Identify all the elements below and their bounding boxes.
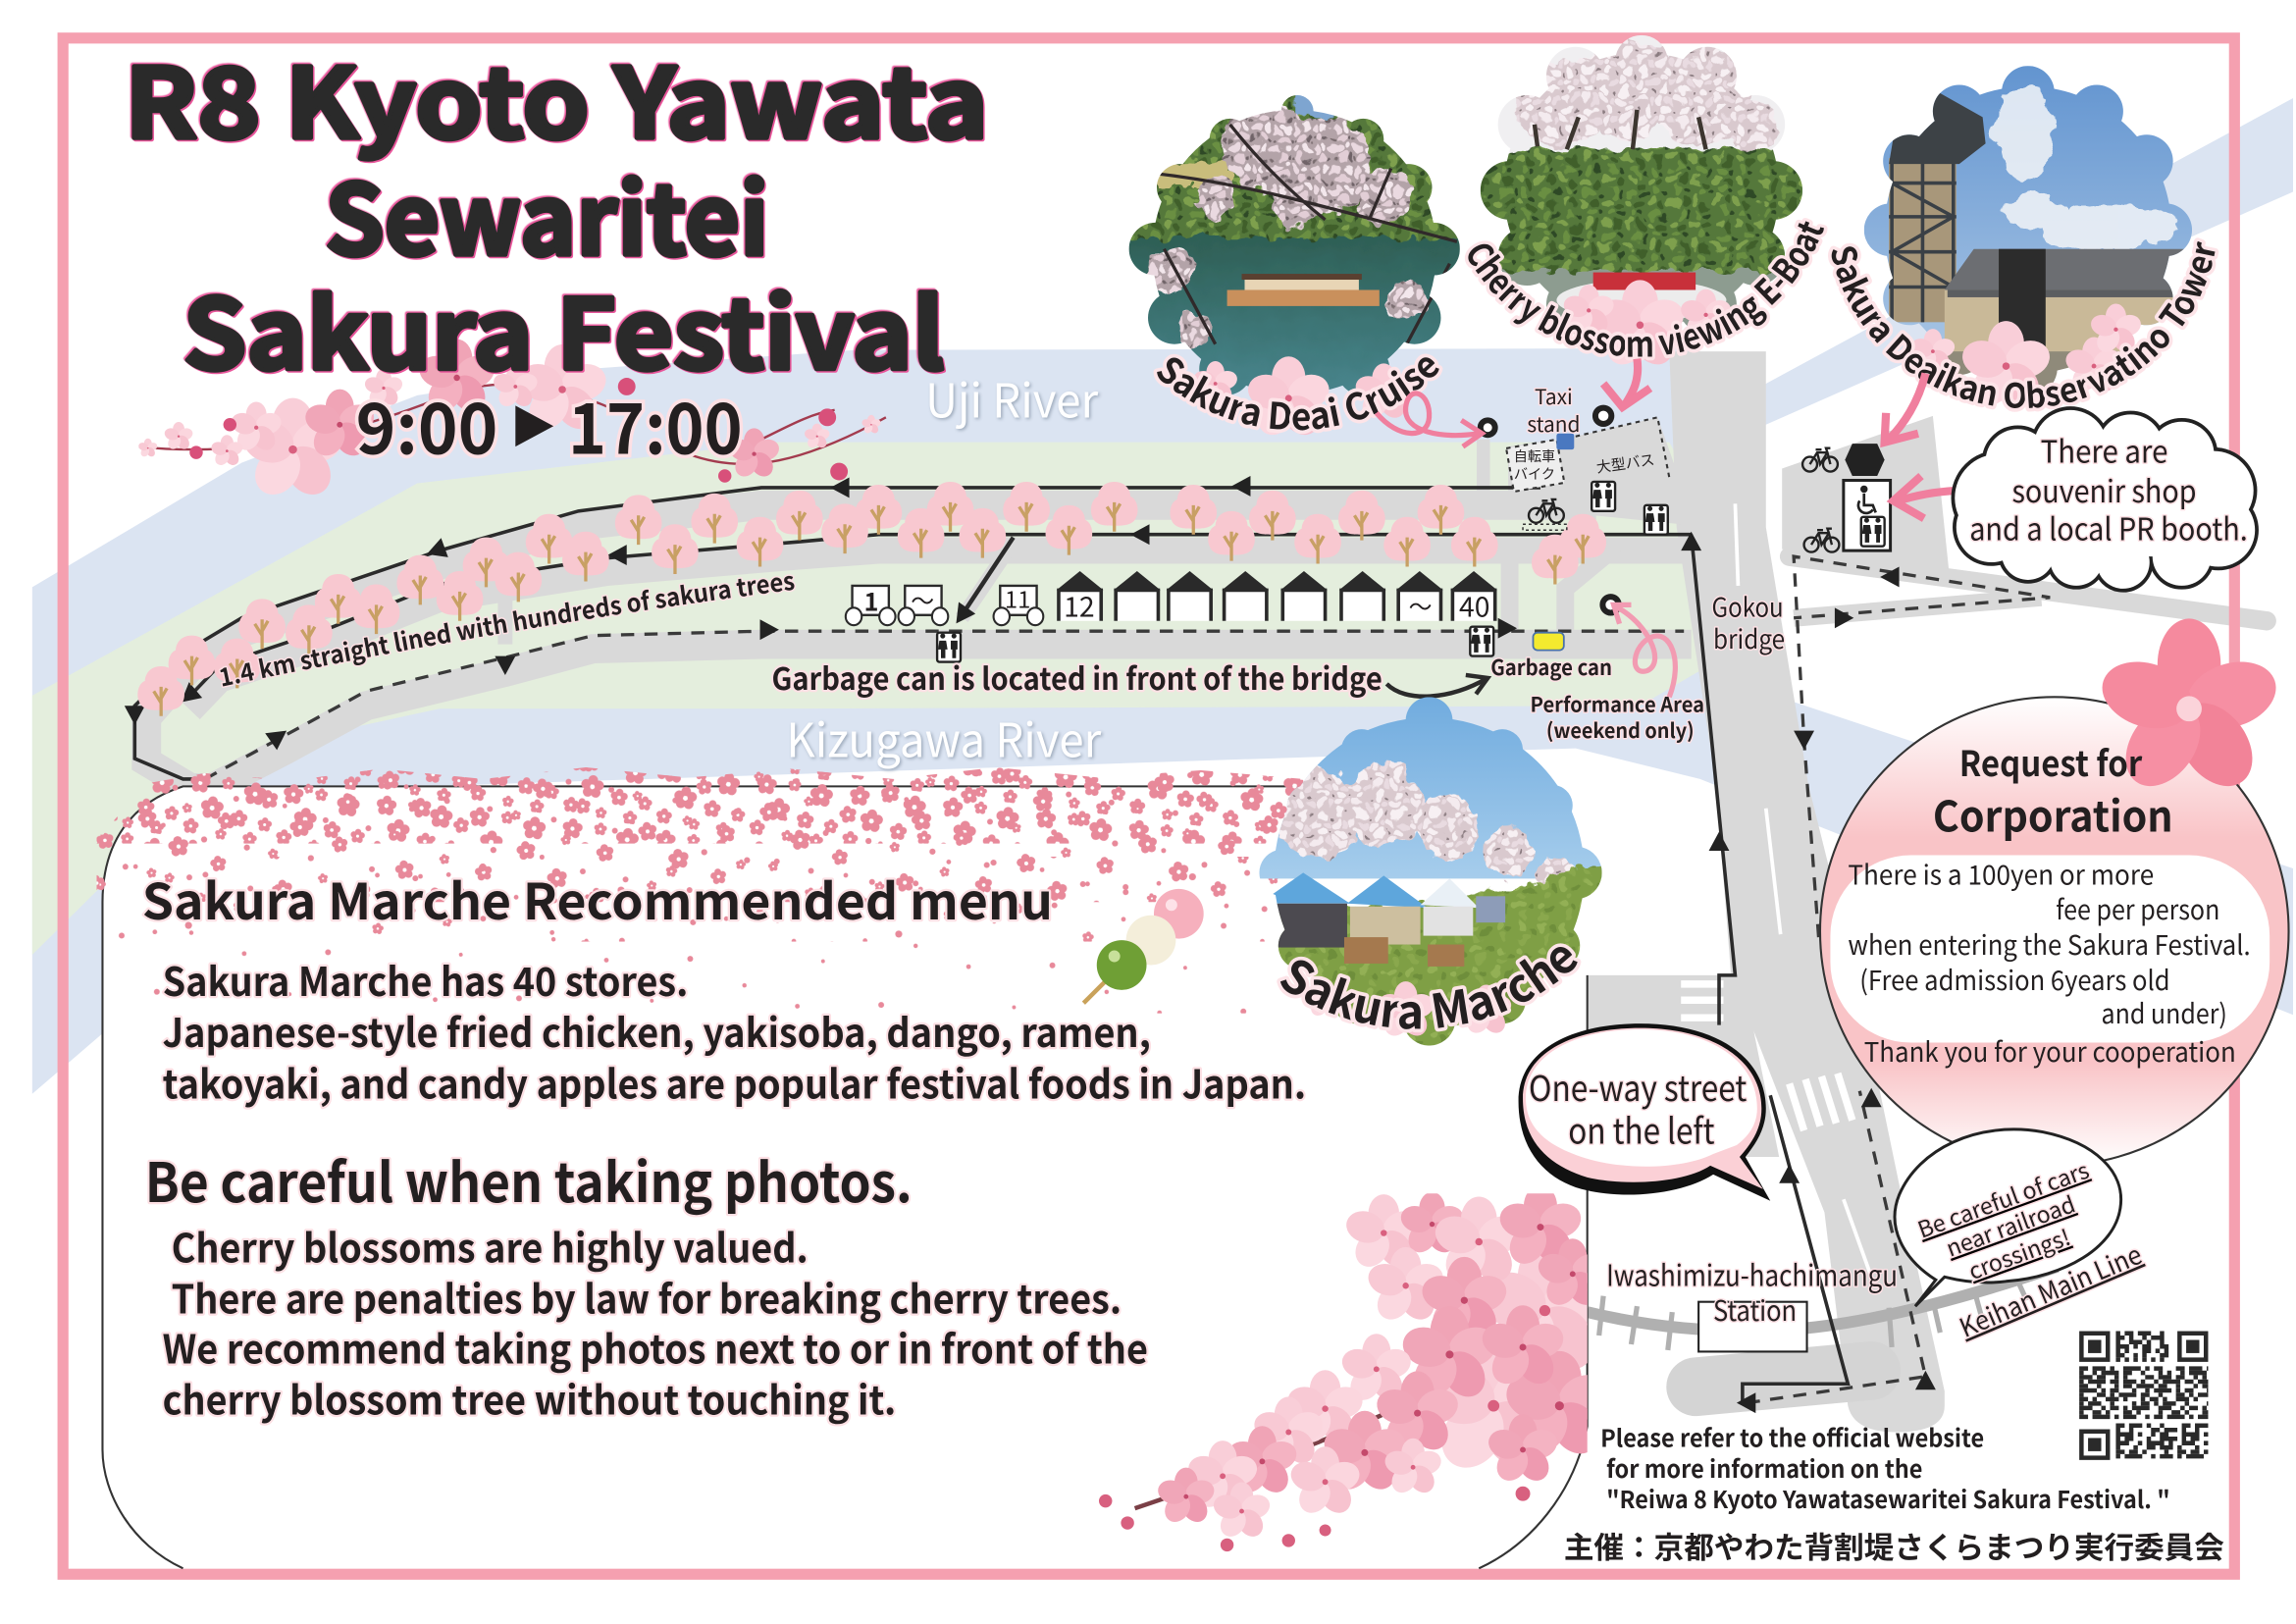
icon: time arrow	[515, 405, 553, 446]
solid route lines	[134, 488, 1848, 1403]
icon: location pins	[1481, 408, 1619, 613]
cloud callout: souvenir shop: souvenir shop	[2011, 468, 2197, 512]
illustration: cherry blossom branch	[1099, 1185, 1618, 1551]
map labels: stand	[1527, 409, 1580, 439]
label: garbage can: Garbage can	[1490, 652, 1612, 682]
text: official website note: Please refer to the official website	[1600, 1419, 1984, 1454]
label decoration: flowers	[1191, 356, 1415, 442]
icon: large pink flower	[2094, 618, 2284, 801]
title: Sakura Festival	[183, 258, 945, 397]
text: Sakura Marche description: Sakura Marche has 40 stores.	[163, 950, 688, 1008]
walking route lines and arrows	[125, 476, 2050, 1413]
label: Gokou bridge: bridge	[1713, 618, 1785, 656]
white text area	[1830, 856, 2270, 1043]
title: R8 Kyoto Yawata	[125, 26, 988, 166]
curved label: Sakura Deaikan Observatino Tower	[1830, 241, 2217, 408]
decorative blossom branch behind time	[137, 340, 886, 503]
panel: Sakura Marche and photo notice	[97, 767, 1618, 1568]
heading: Be careful when taking photos: Be careful when taking photos.	[145, 1139, 913, 1218]
photo: Sakura Deai Cruise: Sakura Deai Cruise	[1154, 353, 1442, 434]
station: Iwashimizu-hachimangu: Iwashimizu-hachimangu	[1606, 1251, 1898, 1294]
text: official website note	[1600, 1419, 2170, 1516]
text: photo notice: Cherry blossoms are highly valued.	[172, 1216, 809, 1274]
map labels	[179, 338, 1786, 793]
large stalls: 40	[1459, 585, 1490, 625]
panel: Request for Corporation	[1820, 618, 2289, 1166]
riverbank green land	[32, 443, 1700, 955]
road markings	[1681, 503, 1871, 1277]
falling petal confetti	[97, 767, 1303, 1014]
river label: Uji River: Uji River	[925, 363, 1099, 431]
text: photo notice	[163, 1216, 1148, 1427]
arrow: to taxi stand	[1603, 359, 1650, 407]
text: admission fee request	[1848, 853, 2251, 1070]
label: Keihan Main Line: Keihan Main Line	[1953, 1233, 2147, 1345]
text: official website note: "Reiwa 8 Kyoto Yawatasewaritei Sakura Festival. "	[1606, 1481, 2170, 1516]
text: Sakura Marche description: takoyaki, and candy apples are popular festival foods in Japan.	[163, 1052, 1306, 1110]
icon: dango skewer	[1083, 889, 1204, 1003]
arrow: to garbage can	[1386, 675, 1487, 697]
callout: one-way street	[1519, 1023, 1770, 1201]
text: Sakura Marche description: Japanese-style fried chicken, yakisoba, dango, ramen,	[163, 1001, 1151, 1059]
curved label: Cherry blossom viewing E-Boat	[1464, 223, 1826, 356]
text: official website note: for more information on the	[1606, 1450, 1922, 1486]
photo: Sakura Deaikan Observation Tower	[1828, 66, 2242, 457]
label: Gokou bridge: Gokou	[1712, 586, 1784, 624]
label decoration: flowers	[1908, 304, 2144, 413]
photo: Cherry blossom viewing E-Boat: Cherry blossom viewing E-Boat	[1465, 218, 1827, 361]
text: admission fee request: (Free admission 6years old	[1859, 959, 2170, 998]
marche photo	[1260, 697, 1602, 1046]
map facilities and icons	[937, 408, 1891, 662]
text: admission fee request: fee per person	[2056, 888, 2219, 927]
label: performance area: Performance Area	[1530, 689, 1704, 718]
label: performance area: (weekend only)	[1546, 715, 1695, 745]
photo: Sakura Deai Cruise	[1128, 94, 1526, 436]
callout: railroad crossing warning	[1895, 1129, 2121, 1306]
roads	[146, 351, 2267, 1433]
label: 1.4 km straight	[221, 589, 801, 687]
photo: Sakura Marche: Sakura Marche	[1277, 943, 1582, 1033]
arrow: to souvenir shop	[1894, 476, 1957, 518]
event time: 17:00	[568, 373, 743, 475]
panel outline	[102, 786, 1588, 1568]
photo: Cherry blossom viewing E-Boat	[1465, 35, 1874, 412]
station: Iwashimizu-hachimangu: Station	[1713, 1289, 1797, 1330]
small stalls	[846, 580, 1043, 625]
label decoration: flowers	[1561, 280, 1734, 372]
arrow: to observatory	[1885, 374, 1925, 443]
text: photo notice: There are penalties by law for breaking cherry trees.	[172, 1268, 1122, 1326]
icon: garbage can	[1533, 633, 1564, 651]
map labels: 1.4 km straight lined with hundreds of sakura trees	[219, 575, 796, 688]
callout: railroad crossing warning: Be careful of cars	[1912, 1152, 2093, 1245]
large stalls	[1057, 571, 1497, 625]
text: admission fee request: when entering the Sakura Festival.	[1848, 923, 2251, 963]
label: garbage can note: Garbage can is located in front of the bridge	[771, 655, 1383, 700]
cruise boat photo	[1128, 95, 1460, 394]
title: Sewaritei	[325, 144, 768, 284]
label: taxi stand: Taxi	[1535, 382, 1573, 411]
callout: railroad crossing warning: near railroad	[1941, 1186, 2079, 1264]
text: photo notice: We recommend taking photos next to or in front of the	[163, 1317, 1148, 1375]
market stalls row	[846, 571, 1497, 625]
callout: railroad crossing warning: crossings!	[1963, 1219, 2074, 1286]
text: photo notice: cherry blossom tree without touching it.	[163, 1369, 896, 1427]
icon: toilets	[937, 482, 1668, 662]
bicycle parking and bus areas: 大型バス	[1595, 448, 1656, 478]
station: Iwashimizu-hachimangu	[1606, 1251, 1898, 1351]
icon: wheelchair	[1858, 487, 1876, 513]
QR code	[2079, 1334, 2208, 1458]
observatory facility icons	[1802, 444, 1891, 552]
cherry trees along the bank	[137, 482, 1606, 716]
direction arrowheads	[125, 476, 1936, 1413]
callout: one-way street: One-way street	[1529, 1061, 1747, 1112]
small stalls: ～	[911, 582, 934, 616]
organizer credit: 主催：京都やわた背割堤さくらまつり実行委員会	[1564, 1532, 2224, 1565]
label: Gokou bridge	[1712, 586, 1785, 656]
text: Sakura Marche description	[163, 950, 1306, 1110]
photo: Sakura Deaikan Observation Tower: Sakura Deaikan Observatino Tower	[1828, 237, 2219, 412]
small stalls: 1	[863, 583, 878, 618]
large stalls: ～	[1409, 588, 1433, 622]
event time: 9:00	[356, 373, 497, 475]
e-boat photo	[1480, 35, 1802, 334]
rivers	[32, 98, 2293, 1094]
arrow: to cruise pin	[1377, 393, 1482, 446]
callout: one-way street: on the left	[1568, 1104, 1715, 1155]
heading: Sakura Marche Recommended menu: Sakura Marche Recommended menu	[142, 862, 1053, 934]
cloud callout: souvenir shop: There are	[2041, 429, 2167, 473]
tower photo	[1864, 66, 2192, 387]
curved label: Sakura Deai Cruise	[1154, 363, 1446, 430]
label: performance area	[1530, 689, 1704, 745]
heading: Request for Corporation: Request for	[1959, 736, 2143, 787]
small stalls: 11	[1005, 580, 1030, 614]
label decoration: flowers	[1304, 979, 1514, 1041]
bicycle parking and bus areas: 自転車	[1514, 446, 1555, 466]
large stalls: 12	[1064, 585, 1095, 625]
arrow: to performance area	[1614, 604, 1675, 697]
text: admission fee request: and under)	[2102, 992, 2227, 1031]
title	[125, 26, 988, 397]
pink pointer arrows	[1377, 359, 1957, 518]
cloud callout: souvenir shop	[1955, 410, 2255, 589]
text: admission fee request: There is a 100yen or more	[1848, 853, 2154, 892]
cloud callout: souvenir shop: and a local PR booth.	[1969, 506, 2248, 550]
dashed route lines	[205, 556, 2050, 1403]
bicycle parking and bus areas: バイク	[1514, 464, 1555, 484]
heading: Request for Corporation	[1933, 736, 2173, 845]
river label: Kizugawa River: Kizugawa River	[786, 704, 1102, 771]
text: admission fee request: Thank you for your cooperation	[1864, 1030, 2236, 1070]
heading: Request for Corporation: Corporation	[1933, 784, 2173, 845]
circle background	[1820, 697, 2289, 1166]
railway	[1588, 1267, 2058, 1350]
panel background	[102, 786, 1588, 1568]
bicycle parking and bus areas	[1506, 417, 1669, 530]
curved label: Sakura Marche	[1277, 952, 1591, 1028]
event time	[356, 373, 743, 475]
photo: Sakura Marche	[1260, 697, 1650, 1100]
